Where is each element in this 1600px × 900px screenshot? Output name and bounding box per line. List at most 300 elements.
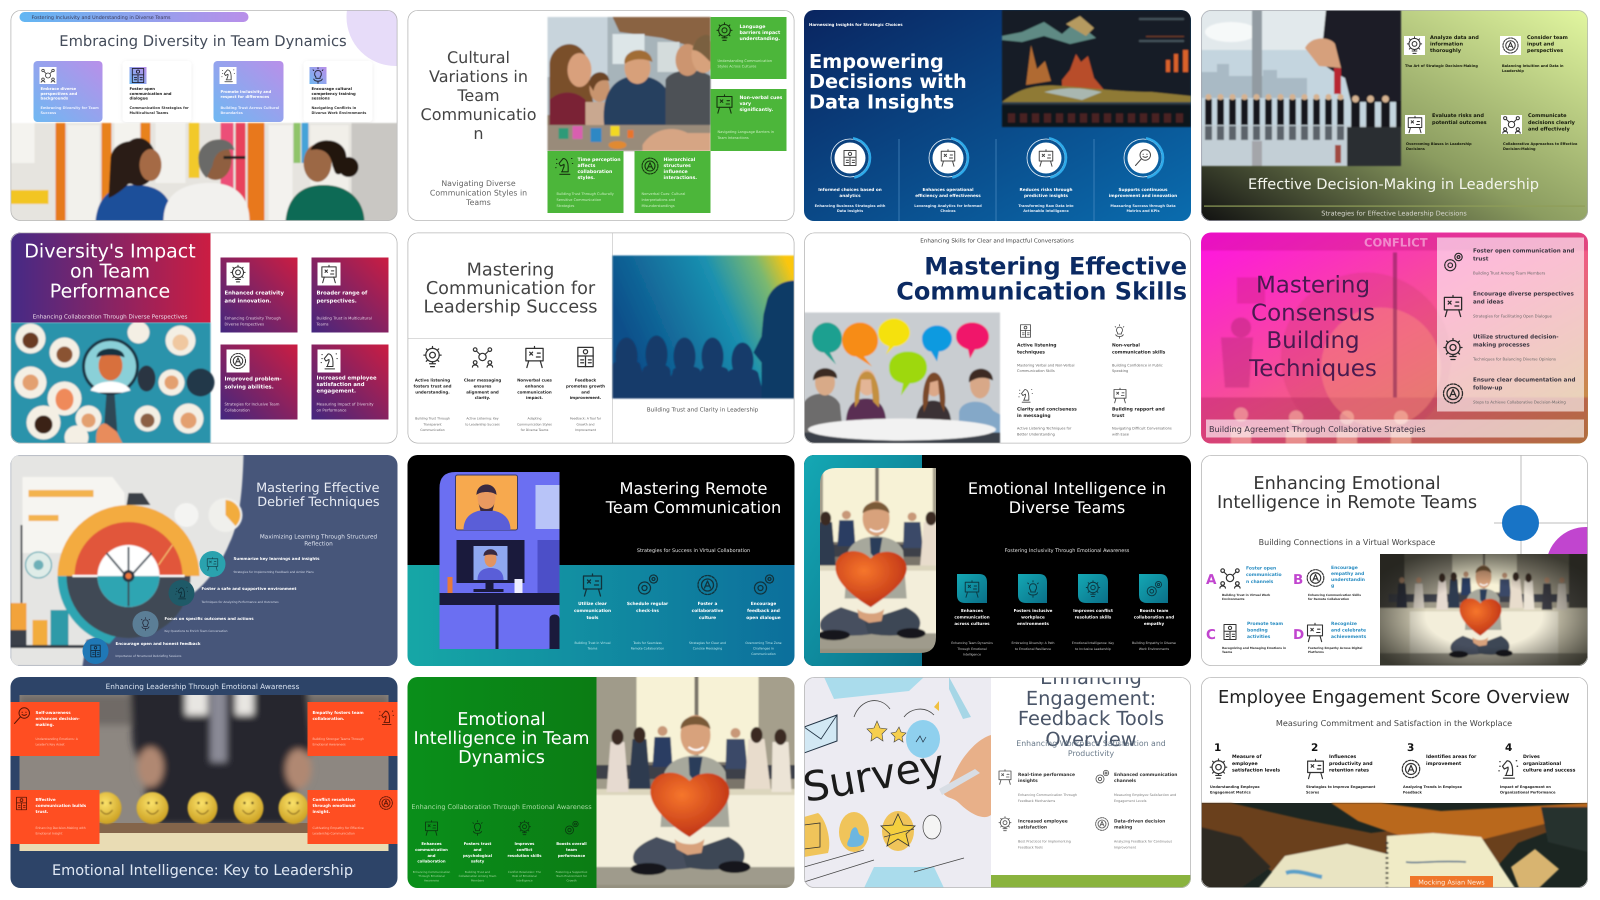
box: effective communication: communication builds	[36, 803, 87, 808]
practice: open communication: Building Trust Among Team Members	[1473, 270, 1545, 276]
practice: diverse perspectives: Encourage diverse perspectives	[1473, 290, 1574, 298]
column: open dialogue: Overcoming Time Zone	[745, 641, 782, 645]
photo: notebook on desk: Mocking Asian News	[1418, 878, 1485, 886]
column: active listening: Building Trust Through	[415, 416, 450, 420]
slide 10: Mastering Remote Team Communication	[408, 455, 794, 666]
metric 4: Impact of Engagement on	[1500, 785, 1551, 789]
card border	[408, 10, 794, 221]
subtitle: Enhancing Workplace Satisfaction and	[1016, 739, 1166, 748]
subtitle: Strategies for Effective Leadership Decisions	[1321, 210, 1467, 218]
column: open dialogue: Encourage	[751, 601, 776, 607]
title: Mastering	[467, 260, 554, 280]
column: trust: Fosters trust	[464, 841, 491, 846]
metric 4: culture and success	[1523, 768, 1576, 774]
column: collaboration and empathy: collaboration and	[1134, 614, 1174, 620]
column: conflict: conflict	[517, 847, 533, 852]
faded conflict illustration	[1201, 232, 1588, 444]
title: Emotional Intelligence: Key to Leadership	[52, 863, 353, 879]
column: feedback: and	[581, 390, 590, 394]
column: communication: collaboration	[417, 858, 446, 864]
practice: open communication: trust	[1473, 256, 1489, 262]
item: real-time insights: insights	[1018, 778, 1038, 784]
practice: structured processes: Utilize structured decision-	[1473, 334, 1559, 340]
column: conflict resolution	[1072, 574, 1114, 651]
column: conflict: Intelligence	[516, 878, 533, 882]
box: effective communication	[10, 790, 100, 844]
item C: activities	[1247, 634, 1271, 640]
card: problem solving: Improved problem-	[224, 376, 282, 382]
column: inclusive workplace: workplace	[1021, 614, 1045, 620]
item: employee satisfaction: Feedback Tools	[1018, 846, 1043, 850]
card border	[1201, 455, 1588, 666]
column: active listening: Active listening	[415, 378, 450, 382]
insight: continuous improvement: Measuring Success through Data	[1110, 204, 1176, 208]
insight: continuous improvement: improvement and innovation	[1109, 193, 1177, 198]
item: non-verbal: communication skills	[1112, 350, 1166, 356]
card: embrace perspectives: perspectives and	[40, 91, 77, 96]
card border	[804, 233, 1191, 443]
title: Leadership Success	[423, 298, 598, 318]
column: feedback: Feedback	[575, 378, 597, 382]
box: time perception: Strategies	[556, 204, 575, 208]
decorative purple circle	[1546, 527, 1600, 607]
subtitle: Strategies for Success in Virtual Collaboration	[637, 548, 750, 554]
box: time perception: styles.	[578, 175, 595, 181]
insight: informed choices	[815, 135, 886, 213]
card: satisfaction: Measuring Impact of Diversity	[316, 402, 374, 406]
slide 4: Effective Decision-Making in Leadership	[1201, 10, 1588, 221]
practice: structured processes	[1444, 334, 1559, 362]
title: Team Communication	[605, 498, 781, 517]
item: communication channels: Measuring Employee Satisfaction and	[1114, 793, 1176, 797]
card: promote inclusivity: Boundaries	[220, 111, 243, 115]
card: embrace perspectives: Embracing Diversity for Team	[40, 106, 99, 110]
card: creativity: Diverse Perspectives	[224, 322, 264, 326]
box: time perception	[548, 151, 624, 213]
column: clear messaging: Active Listening: Key	[466, 416, 499, 420]
item D: and celebrate	[1331, 628, 1366, 634]
item: data-driven making: Improvement	[1114, 846, 1137, 850]
title: Debrief Techniques	[257, 495, 380, 510]
column: nonverbal cues: impact.	[526, 395, 543, 400]
column: collaborative culture: Concise Messaging	[693, 646, 722, 650]
header band with title: on Team	[70, 260, 150, 282]
insight: continuous improvement	[1109, 135, 1177, 213]
box: language barriers: Understanding Communication	[718, 59, 772, 63]
item: active listening	[1017, 325, 1074, 373]
item: evaluate risks: potential outcomes	[1432, 120, 1487, 126]
card: cultural competency: Navigating Conflicts in	[312, 106, 357, 110]
item: communicate decisions: Decision-Making	[1503, 147, 1536, 151]
slide 16: Employee Engagement Score Overview	[1201, 677, 1588, 888]
column: conflict: Role of Emotional	[512, 874, 537, 878]
subtitle bar: Building Agreement Through Collaborative Strategies	[1209, 424, 1426, 434]
subtitle: Teams	[465, 198, 491, 207]
item B: Encourage	[1331, 565, 1358, 571]
word on sheet: Survey	[799, 740, 948, 812]
item C: Promote team	[1247, 621, 1283, 627]
column: active listening	[413, 346, 452, 432]
practice: diverse perspectives	[1444, 290, 1574, 318]
item: non-verbal: Building Confidence in Public	[1112, 364, 1163, 368]
column: performance: Growth	[566, 878, 577, 882]
item C: Teams	[1222, 650, 1233, 654]
subtitle: Building Connections in a Virtual Workspace	[1259, 538, 1435, 547]
box: self-awareness: enhances decision-	[36, 716, 80, 721]
card: perspectives: Teams	[316, 322, 329, 326]
metric 2: Strategies to Improve Engagement	[1306, 785, 1376, 789]
column: performance: Fostering a Supportive	[556, 870, 588, 874]
column: communication: communication	[415, 847, 448, 852]
box: non-verbal cues: Non-verbal cues	[740, 95, 783, 101]
column: communication across cultures: Enhancing Team Dynamics	[951, 641, 993, 645]
photo: team around table	[548, 17, 716, 151]
box: language barriers: Language	[740, 24, 765, 30]
box: hierarchical structures: Nonverbal Cues: Cultural	[642, 192, 685, 196]
card: problem solving: solving abilities.	[224, 384, 274, 390]
column: conflict: Conflict Resolution: The	[508, 870, 541, 874]
tagline: Enhancing Leadership Through Emotional Awareness	[106, 682, 300, 691]
insight: reduces risks	[1018, 135, 1074, 213]
item: clarity: Better Understanding	[1017, 432, 1055, 436]
insight: continuous improvement: Metrics and KPIs	[1126, 209, 1160, 213]
column: collaboration and empathy: empathy	[1144, 621, 1164, 626]
photo: data landscape	[1002, 10, 1191, 127]
title: Employee Engagement Score Overview	[1218, 687, 1570, 708]
column: conflict resolution: to Inclusive Leadership	[1075, 647, 1111, 651]
column: performance: team	[566, 847, 577, 852]
card: problem solving	[220, 344, 298, 420]
card: creativity: Enhanced creativity	[224, 290, 284, 296]
column: clear tools: tools	[586, 615, 599, 621]
title: Mastering	[1256, 272, 1370, 298]
card: embrace perspectives	[34, 61, 102, 122]
card: creativity	[220, 258, 298, 332]
column: check-ins: Remote Collaboration	[631, 646, 664, 650]
item: active listening: Active listening	[1017, 342, 1057, 348]
item: rapport: Navigating Difficult Conversations	[1112, 426, 1172, 430]
column: nonverbal cues: for Diverse Teams	[521, 428, 549, 432]
column: collaborative culture: culture	[699, 615, 716, 621]
column: performance	[555, 821, 588, 882]
item C: C	[1206, 627, 1216, 643]
item: communication channels: Enhanced communication	[1114, 772, 1177, 778]
box: self-awareness: making.	[36, 722, 54, 727]
column: check-ins: check-ins	[636, 608, 659, 614]
practice: open communication: Foster open communication and	[1473, 248, 1574, 254]
item A: A	[1206, 572, 1217, 588]
column: open dialogue: feedback and	[747, 608, 780, 614]
item D: Fostering Empathy Across Digital	[1308, 646, 1362, 650]
metric 1: Measure of	[1232, 754, 1262, 760]
box: effective communication: trust.	[36, 809, 49, 814]
subtitle: Fostering Inclusivity Through Emotional Awareness	[1005, 548, 1130, 554]
card: satisfaction: satisfaction and	[316, 381, 365, 388]
item B: Enhancing Communication Skills	[1308, 593, 1361, 597]
card: open communication: communication and	[130, 91, 172, 96]
metric 2: 2	[1311, 742, 1318, 754]
item: data-driven making: Analyzing Feedback for Continuous	[1114, 840, 1172, 844]
step: safe environment: Techniques for Analyzing Performance and Outcomes	[200, 600, 279, 604]
column: communication across cultures: Through Emotional	[956, 647, 987, 651]
item: communication channels	[1096, 770, 1177, 803]
item: evaluate risks: Evaluate risks and	[1432, 113, 1484, 119]
practice: documentation: Steps to Achieve Collaborative Decision-Making	[1473, 400, 1566, 404]
subtitle: Measuring Commitment and Satisfaction in the Workplace	[1276, 718, 1512, 728]
title: Enhancing Emotional	[1253, 474, 1441, 494]
box: self-awareness	[10, 702, 100, 756]
item: non-verbal: Speaking	[1112, 369, 1128, 373]
column: nonverbal cues: communication	[517, 390, 552, 394]
card: promote inclusivity	[214, 61, 284, 122]
insight: operational efficiency: Leveraging Analytics for Informed	[914, 204, 982, 208]
metric 3	[1402, 742, 1477, 794]
box: language barriers: barriers impact	[740, 30, 781, 36]
header band with title: Diversity's Impact	[24, 240, 196, 262]
box: non-verbal cues: Team Interactions	[716, 136, 749, 140]
item: clarity: in messaging	[1017, 413, 1051, 419]
item B: g	[1331, 584, 1334, 589]
card: embrace perspectives: Success	[40, 111, 56, 115]
box: conflict resolution: Leadership Communication	[312, 832, 355, 836]
box: hierarchical structures: Interpretations and	[642, 198, 675, 202]
box: empathy: collaboration.	[312, 716, 345, 721]
box: hierarchical structures	[634, 151, 710, 213]
column: inclusive workplace: Embracing Diversity: A Path	[1011, 641, 1055, 645]
title: Feedback Tools	[1018, 707, 1164, 730]
decorative blue circle	[1502, 505, 1539, 541]
column: collaborative culture	[689, 576, 726, 650]
card: promote inclusivity: respect for differences	[220, 94, 270, 99]
column: communication: Awareness	[424, 878, 440, 882]
column: open dialogue: open dialogue	[746, 615, 781, 621]
box: non-verbal cues: Navigating Language Barriers in	[718, 130, 774, 134]
slide 8: Mastering Consensus Building Techniques	[1201, 232, 1588, 444]
insight: reduces risks: Actionable Intelligence	[1023, 209, 1069, 213]
column: collaboration and empathy: Work Environments	[1139, 647, 1169, 651]
column: collaborative culture: Strategies for Clear and	[689, 641, 726, 645]
title: Intelligence in Team	[413, 729, 590, 749]
title: Enhancing	[1040, 666, 1142, 689]
title: Building	[1266, 328, 1360, 354]
column: communication: Through Emotional	[417, 874, 445, 878]
item: team input: Leadership	[1502, 69, 1524, 73]
column: trust: Members	[471, 878, 485, 882]
card border	[804, 677, 1191, 888]
footer bar	[991, 875, 1191, 888]
card border	[11, 10, 397, 221]
card: open communication: Multicultural Teams	[130, 111, 168, 115]
column: collaboration and empathy: Boosts team	[1140, 608, 1168, 613]
item: rapport: with Ease	[1112, 432, 1129, 436]
box: non-verbal cues: vary	[740, 102, 751, 107]
column: performance: Team Environment for	[555, 874, 588, 878]
header band with title: Enhancing Collaboration Through Diverse Perspectives	[33, 314, 187, 320]
subtitle: Enhancing Collaboration Through Emotional Awareness	[411, 803, 592, 811]
slide 2: Cultural Variations in Team Communication	[408, 10, 794, 221]
item D: Platforms	[1308, 650, 1324, 654]
item: active listening: techniques	[1017, 350, 1045, 356]
item: non-verbal	[1112, 325, 1166, 373]
box: empathy: Empathy fosters team	[312, 710, 364, 715]
column: conflict	[507, 821, 542, 882]
photo: man with heart	[456, 667, 956, 900]
slide 6: Mastering Communication for Leadership Success	[408, 232, 794, 444]
column: trust: Collaboration Among Team	[459, 874, 497, 878]
box: time perception: Sensitive Communication	[556, 198, 601, 202]
metric 1: Engagement Metrics	[1210, 790, 1251, 794]
metric 1: 1	[1214, 742, 1221, 754]
item: analyze data: The Art of Strategic Decision-Making	[1405, 64, 1478, 68]
metric 4	[1499, 742, 1576, 794]
item: real-time insights	[999, 770, 1077, 803]
item: analyze data: Analyze data and	[1430, 35, 1479, 41]
item: clarity	[1017, 390, 1077, 436]
column: communication across cultures: Intelligence	[963, 652, 981, 656]
step: specific outcomes: Key Questions to Enrich Team Conversation	[164, 629, 228, 633]
slide 12: Enhancing Emotional Intelligence in Remote Teams	[1201, 455, 1600, 678]
column: conflict: Improves	[515, 841, 535, 846]
column: communication across cultures: across cultures	[954, 621, 990, 626]
item: team input: Consider team	[1527, 35, 1568, 41]
photo: suit and smiling eggs	[20, 687, 388, 851]
card: problem solving: Strategies for Inclusive Team	[224, 402, 280, 406]
card: perspectives	[312, 258, 388, 332]
box: self-awareness: Self-awareness	[36, 710, 71, 715]
item: communication channels: Engagement Levels	[1114, 799, 1147, 803]
column: clear messaging: Clear messaging	[464, 378, 501, 382]
box: conflict resolution: insight.	[312, 809, 330, 814]
box: time perception: affects	[578, 163, 596, 169]
box: hierarchical structures: structures	[664, 163, 691, 169]
item A: Building Trust in Virtual Work	[1222, 593, 1270, 597]
column: clear messaging: alignment and	[466, 390, 499, 394]
item: employee satisfaction	[999, 817, 1071, 850]
title: Cultural	[447, 48, 510, 67]
column: trust: safety	[471, 858, 485, 864]
title: Team	[456, 86, 500, 105]
box: effective communication: Enhancing Decision-Making with	[36, 826, 86, 830]
metric 2: Influences	[1329, 754, 1356, 760]
column: collaboration and empathy: Building Empathy in Diverse	[1132, 641, 1176, 645]
slide 7: Mastering Effective Communication Skills	[804, 232, 1191, 444]
photo: survey sheet	[799, 677, 991, 888]
item B	[1293, 565, 1365, 601]
card: cultural competency: competency training	[312, 91, 356, 96]
title: Emotional Intelligence in	[968, 479, 1166, 498]
metric 1	[1210, 742, 1280, 794]
card border	[1201, 677, 1588, 888]
title: Communicatio	[421, 105, 536, 124]
card border	[1201, 10, 1588, 221]
step: honest feedback: Encourage open and honest feedback	[116, 641, 201, 646]
item C: bonding	[1247, 628, 1268, 634]
item A: n channels	[1246, 579, 1274, 585]
column: nonverbal cues: Adapting	[528, 416, 541, 420]
item: rapport	[1112, 388, 1172, 436]
box: non-verbal cues	[710, 89, 786, 151]
tagline: Enhancing Skills for Clear and Impactful Conversations	[920, 238, 1074, 244]
column: communication: and	[428, 853, 436, 858]
box: language barriers: understanding.	[740, 36, 780, 42]
item B: for Remote Collaboration	[1308, 597, 1349, 601]
slide 5: Diversity's Impact on Team Performance	[10, 232, 398, 450]
column: active listening: Communication	[420, 428, 445, 432]
column: feedback: Growth and	[576, 422, 595, 426]
box: language barriers	[710, 17, 786, 79]
box: hierarchical structures: Hierarchical	[664, 157, 696, 163]
column: nonverbal cues: enhance	[525, 384, 544, 388]
photo: meeting with speech bubbles	[804, 312, 1000, 444]
title: Emotional	[457, 710, 546, 730]
box: non-verbal cues: significantly.	[740, 107, 773, 113]
item: clarity: Clarity and conciseness	[1017, 406, 1077, 412]
step: safe environment	[168, 580, 297, 606]
illustration: diverse faces	[10, 322, 214, 450]
box: self-awareness: Leader's Key Asset	[36, 742, 65, 746]
column: inclusive workplace: environments	[1017, 621, 1049, 626]
photo: three colleagues at wall	[10, 123, 398, 221]
card: satisfaction	[312, 344, 388, 420]
metric 1: satisfaction levels	[1232, 768, 1280, 774]
metric 2: retention rates	[1329, 768, 1369, 774]
box: empathy: Emotional Awareness	[312, 742, 346, 746]
title: Variations in	[429, 67, 528, 86]
column: clear tools: communication	[574, 608, 611, 614]
column: inclusive workplace	[1011, 574, 1055, 651]
title: Consensus	[1251, 300, 1375, 326]
item D: D	[1293, 627, 1304, 643]
insight: informed choices: analytics	[839, 193, 861, 198]
card: promote inclusivity: Building Trust Across Cultural	[220, 106, 279, 110]
column: clear tools: Utilize clear	[578, 601, 608, 607]
item: team input: input and	[1527, 42, 1554, 48]
item A: Environments	[1222, 597, 1245, 601]
step: specific outcomes	[132, 611, 254, 637]
insight: reduces risks: predictive insights	[1024, 193, 1069, 198]
subtitle bar	[1206, 420, 1584, 438]
card: problem solving: Collaboration	[224, 408, 250, 412]
item: communicate decisions: Collaborative Approaches to Effective	[1503, 142, 1578, 146]
card border	[408, 233, 794, 443]
box: time perception: Time perception	[578, 157, 621, 163]
item: communicate decisions: decisions clearly	[1528, 120, 1576, 126]
card: cultural competency	[304, 61, 372, 122]
item: rapport: Building rapport and	[1112, 406, 1165, 412]
subtitle pill: Fostering Inclusivity and Understanding in Diverse Teams	[32, 15, 171, 21]
item: real-time insights: Enhancing Communication Through	[1018, 793, 1077, 797]
column: trust: and	[474, 847, 482, 852]
item: analyze data	[1404, 35, 1479, 68]
column: performance: performance	[558, 853, 586, 858]
item D	[1293, 621, 1367, 654]
step: summarize: Strategies for Implementing Feedback and Action Plans	[234, 570, 314, 574]
title: Intelligence in Remote Teams	[1217, 493, 1477, 513]
column: communication	[413, 821, 451, 882]
item A: communicatio	[1246, 572, 1282, 578]
column: nonverbal cues	[517, 346, 553, 432]
title: Communication for	[426, 279, 596, 299]
metric 2: Scores	[1306, 790, 1319, 794]
column: conflict: resolution skills	[507, 853, 542, 858]
item: rapport: trust	[1112, 413, 1125, 419]
item: communicate decisions: Communicate	[1528, 113, 1567, 119]
item: real-time insights: Feedback Mechanisms	[1018, 799, 1055, 803]
card: promote inclusivity: Promote inclusivity and	[220, 89, 272, 94]
subtitle pill	[20, 12, 248, 22]
title: n	[473, 124, 484, 143]
column: clear messaging	[464, 348, 501, 426]
